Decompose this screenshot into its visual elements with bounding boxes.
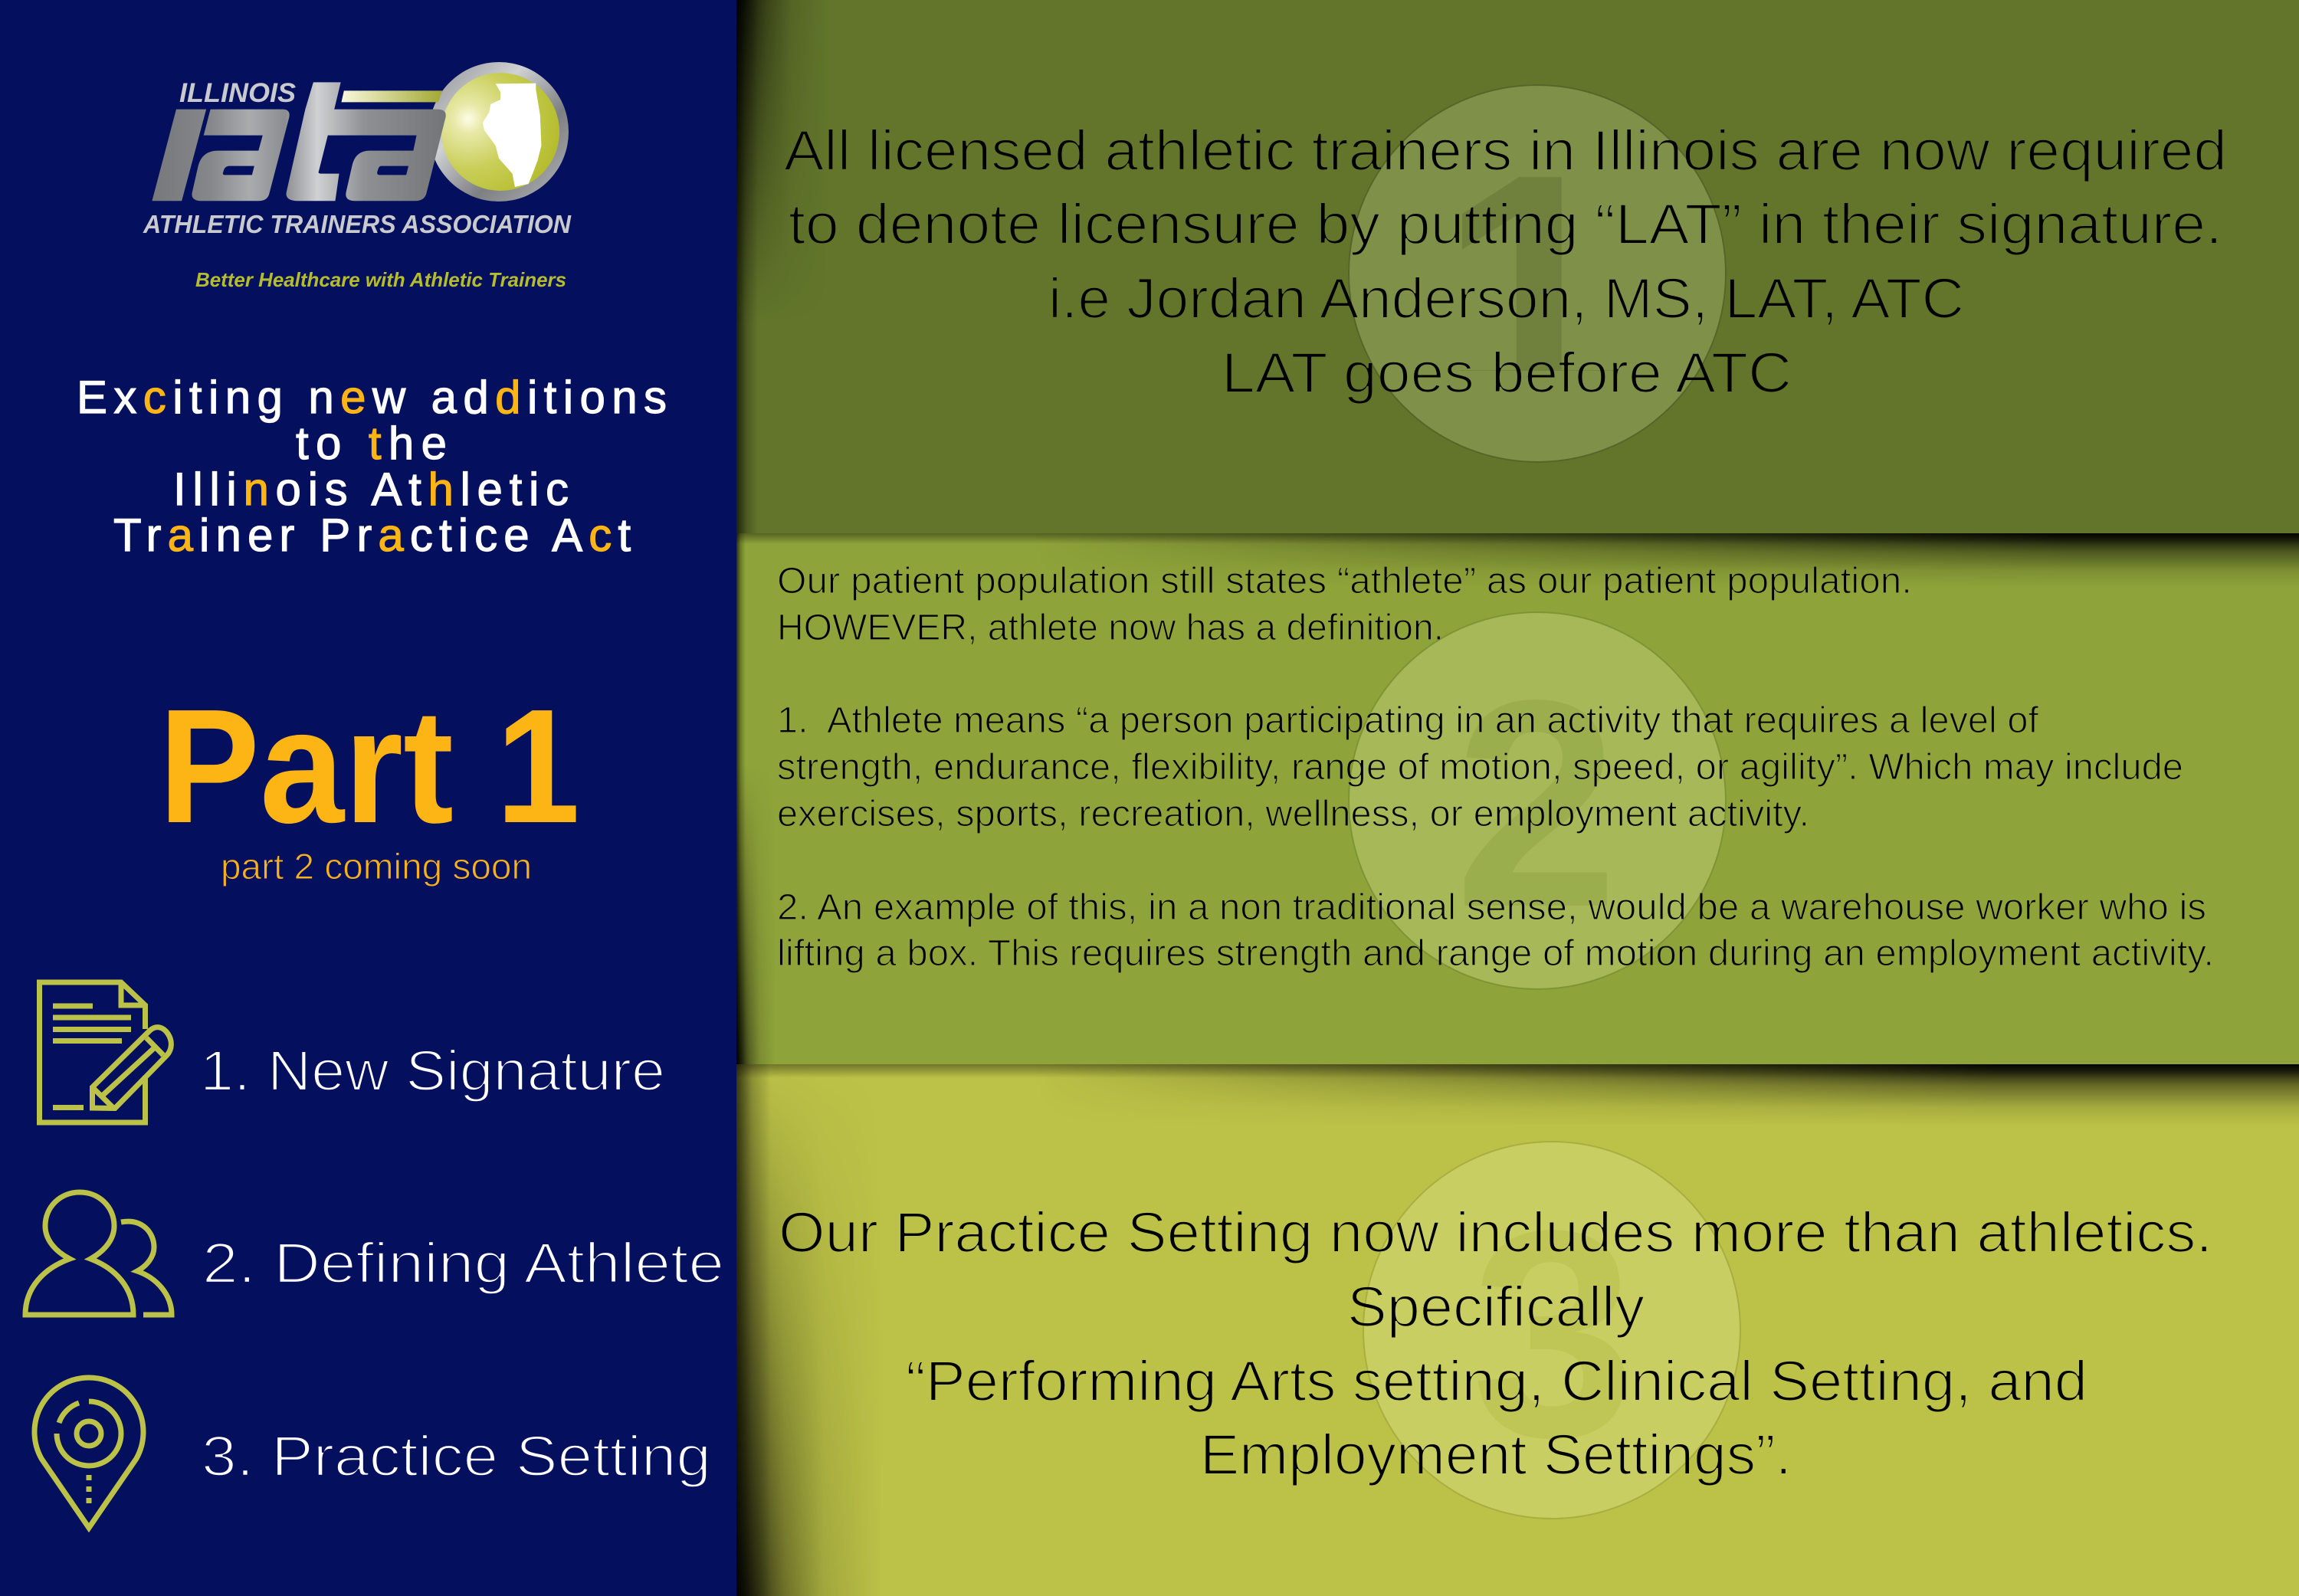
heading: practice act additions: Trainer Practice Act xyxy=(113,510,631,561)
label: 3. Practice Setting: 3. Practice Setting xyxy=(202,1424,711,1488)
numeral: 1: 1 xyxy=(1439,107,1623,474)
text block: athlete definition: strength, endurance, flexibility, range of motion, speed, or agility”. Which may include xyxy=(777,747,2183,788)
icon: document with pencil xyxy=(40,982,171,1122)
heading: practice act additions: Illinois Athletic xyxy=(173,464,569,515)
text block: practice setting: Employment Settings”. xyxy=(1200,1423,1792,1486)
numeral: 2: 2 xyxy=(1455,638,1618,968)
text block: practice setting: Our Practice Setting now includes more than athletics. xyxy=(779,1201,2212,1264)
circle: section 1 badge xyxy=(1349,85,1726,462)
logo mark: state outline and iata letters xyxy=(152,82,541,201)
text block: signature requirement: to denote licensure by putting “LAT” in their signature. xyxy=(789,192,2222,256)
text block: practice setting: Specifically xyxy=(1347,1275,1645,1339)
circle: section 3 badge xyxy=(1363,1142,1740,1519)
text block: athlete definition: HOWEVER, athlete now has a definition. xyxy=(777,608,1444,648)
heading: practice act additions xyxy=(77,372,667,561)
label: 1. New Signature: 1. New Signature xyxy=(200,1039,665,1103)
logo text: association name: ATHLETIC TRAINERS ASSOCIATION xyxy=(143,210,572,238)
text block: signature requirement: i.e Jordan Anderson, MS, LAT, ATC xyxy=(1048,267,1964,330)
text block: athlete definition xyxy=(777,561,2214,974)
icon: two people xyxy=(25,1192,172,1315)
subheading: part 2 coming soon: part 2 coming soon xyxy=(221,846,532,886)
label: 2. Defining Athlete: 2. Defining Athlete xyxy=(202,1231,724,1295)
numeral: 3: 3 xyxy=(1471,1168,1635,1499)
text block: athlete definition: 1. Athlete means “a person participating in an activity that requires a level of xyxy=(777,700,2039,741)
heading: practice act additions: to the xyxy=(296,418,447,469)
heading: Part 1: Part 1 xyxy=(159,675,580,857)
panel: practice setting section xyxy=(736,1064,2299,1596)
logo tagline: Better Healthcare with Athletic Trainers xyxy=(195,268,566,291)
text block: signature requirement: All licensed athletic trainers in Illinois are now required xyxy=(784,119,2227,182)
text block: practice setting xyxy=(779,1201,2212,1486)
logo: Illinois Athletic Trainers Association xyxy=(143,62,572,291)
text block: athlete definition: exercises, sports, recreation, wellness, or employment activity. xyxy=(777,794,1809,834)
circle: section 2 badge xyxy=(1349,612,1726,989)
heading: practice act additions: Exciting new additions xyxy=(77,372,667,423)
panel: signature section xyxy=(736,0,2299,533)
panel: athlete definition section xyxy=(736,533,2299,1064)
logo ball xyxy=(441,73,559,191)
text block: signature requirement xyxy=(784,119,2227,405)
text block: athlete definition: Our patient population still states “athlete” as our patient population. xyxy=(777,561,1912,601)
text block: signature requirement: LAT goes before ATC xyxy=(1222,341,1792,405)
panel: sidebar background xyxy=(0,0,736,1596)
logo text: Illinois: ILLINOIS xyxy=(179,78,296,108)
icon: location pin xyxy=(34,1378,143,1528)
text block: athlete definition: 2. An example of this, in a non traditional sense, would be a warehouse worker who is xyxy=(777,887,2206,928)
logo ring xyxy=(429,62,569,202)
text block: athlete definition: lifting a box. This requires strength and range of motion during an employment activity. xyxy=(777,933,2214,974)
text block: practice setting: “Performing Arts setting, Clinical Setting, and xyxy=(906,1349,2087,1413)
